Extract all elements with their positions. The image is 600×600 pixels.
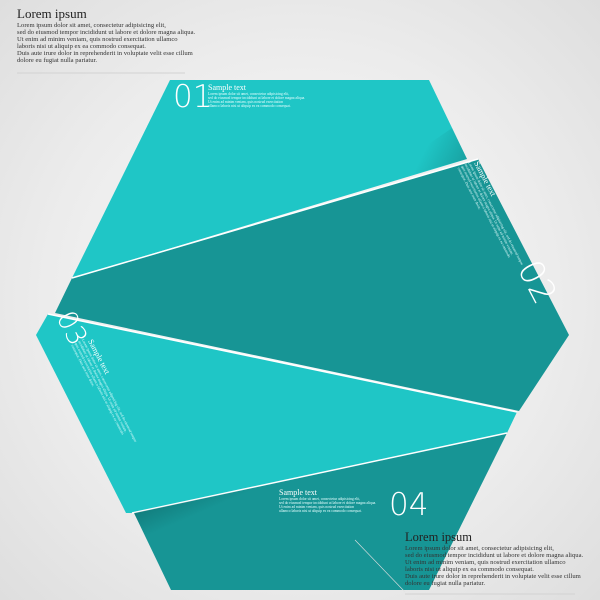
piece 02 (55, 157, 569, 411)
bottom text block: Lorem ipsum (405, 530, 472, 544)
piece 01: Sample text (208, 83, 247, 92)
bottom text block: sed do eiusmod tempor incididunt ut labore et dolore magna aliqua. (405, 552, 584, 559)
piece 03: Lorem ipsum dolor sit amet, consectetur adipisicing elit, sed do eiusmod tempor (80, 338, 138, 444)
piece 04: 04 (389, 487, 428, 523)
top text block: Lorem ipsum (17, 6, 87, 21)
piece 04: Ut enim ad minim veniam, quis nostrud exercitation (279, 505, 354, 510)
piece 04 (132, 433, 507, 590)
piece 02: consequat. Duis aute irure dolor. (457, 167, 482, 210)
top text block (17, 6, 196, 64)
piece 02: Lorem ipsum dolor sit amet, consectetur adipisicing elit, sed do eiusmod tempor (466, 161, 524, 267)
bottom text block: Lorem ipsum dolor sit amet, consectetur adipisicing elit, (405, 545, 554, 552)
top text block: sed do eiusmod tempor incididunt ut labore et dolore magna aliqua. (17, 29, 196, 36)
piece 01: 01 (173, 79, 212, 115)
piece 02: incididunt ut labore et dolore magna aliqua. Ut enim ad minim veniam, (463, 163, 514, 256)
piece 01: ullamco laboris nisi ut aliquip ex ea commodo consequat. (208, 104, 291, 108)
piece 01: Lorem ipsum dolor sit amet, consectetur adipisicing elit, (208, 92, 289, 97)
piece 03: consequat. Duis aute irure dolor. (70, 344, 95, 387)
top text block: dolore eu fugiat nulla pariatur. (17, 57, 97, 64)
piece 04: Lorem ipsum dolor sit amet, consectetur adipisicing elit, (279, 497, 360, 502)
bottom text block: laboris nisi ut aliquip ex ea commodo consequat. (405, 566, 534, 573)
piece 01 (72, 79, 467, 278)
piece 04: sed do eiusmod tempor incididunt ut labore et dolore magna aliqua. (279, 501, 376, 505)
piece 02: Sample text (472, 160, 498, 198)
bottom text block: Duis aute irure dolor in reprehenderit in voluptate velit esse cillum (405, 573, 582, 580)
piece 01: sed do eiusmod tempor incididunt ut labore et dolore magna aliqua. (208, 96, 305, 100)
piece 03 (36, 306, 517, 513)
piece 03: 03 (50, 306, 93, 351)
top text block: laboris nisi ut aliquip ex ea commodo consequat. (17, 43, 146, 50)
piece 03: quis nostrud exercitation ullamco laboris nisi ut aliquip ex ea commodo (74, 342, 125, 436)
piece 04: Sample text (279, 488, 318, 497)
piece 02: 02 (509, 254, 564, 311)
top text block: Ut enim ad minim veniam, quis nostrud exercitation ullamco (17, 36, 178, 43)
top text block: Duis aute irure dolor in reprehenderit in voluptate velit esse cillum (17, 50, 194, 57)
piece 03: Sample text (86, 338, 112, 376)
bottom text block: dolore eu fugiat nulla pariatur. (405, 580, 485, 587)
piece 03: incididunt ut labore et dolore magna aliqua. Ut enim ad minim veniam, (76, 340, 128, 433)
bottom text block: Ut enim ad minim veniam, quis nostrud exercitation ullamco (405, 559, 566, 566)
top text block: Lorem ipsum dolor sit amet, consectetur adipisicing elit, (17, 22, 166, 29)
bottom text block (405, 530, 584, 587)
piece 01: Ut enim ad minim veniam, quis nostrud exercitation (208, 100, 283, 105)
piece 02: quis nostrud exercitation ullamco laboris nisi ut aliquip ex ea commodo (460, 165, 511, 258)
piece 04: ullamco laboris nisi ut aliquip ex ea commodo consequat. (279, 509, 362, 513)
